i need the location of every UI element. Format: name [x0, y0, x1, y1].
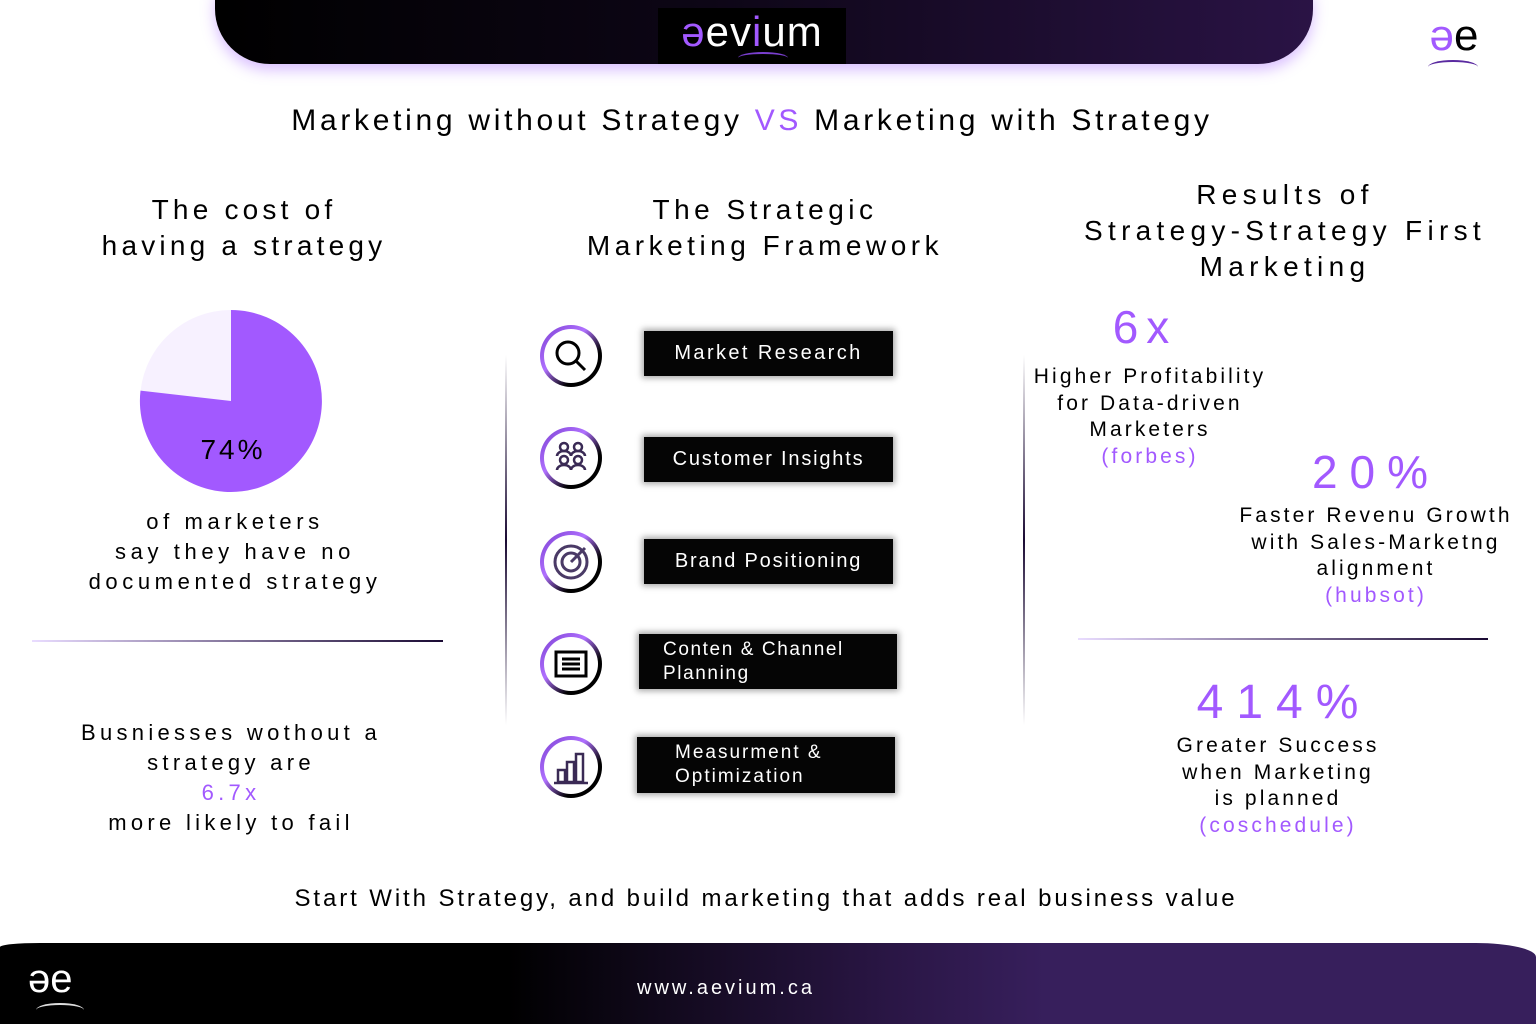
text: revenue [1239, 504, 1513, 606]
footer logo: əe [28, 957, 72, 1001]
heading: results: Strategy-Strategy First [1084, 215, 1486, 246]
text: profitability: Higher Profitability [1034, 365, 1266, 388]
panel: cost [32, 194, 443, 835]
header bar [215, 0, 1313, 64]
heading: results: Marketing [1200, 251, 1370, 282]
heading: framework: Marketing Framework [587, 230, 943, 261]
text: marketers: documented strategy [89, 569, 381, 594]
heading: results: Results of [1196, 179, 1374, 210]
step: brand positioning [644, 539, 893, 584]
heading: cost: The cost of [152, 194, 336, 225]
text: success: Greater Success [1177, 734, 1379, 757]
step: brand positioning: Brand Positioning [675, 550, 862, 572]
stat: 6x: 6x [1113, 301, 1177, 353]
text: profitability: for Data-driven [1057, 392, 1243, 414]
header logo [658, 8, 846, 64]
divider [32, 640, 443, 642]
icon: target [540, 531, 602, 593]
panel: framework [540, 194, 943, 799]
heading: cost: having a strategy [102, 230, 386, 261]
text: profitability: Marketers [1089, 418, 1211, 441]
pie chart 74% [140, 310, 322, 492]
text: revenue: (hubsot) [1325, 584, 1427, 606]
text: profitability: (forbes) [1101, 444, 1199, 468]
heading: framework: The Strategic [652, 194, 878, 225]
text: success: when Marketing [1182, 760, 1374, 784]
heading: cost [102, 194, 386, 261]
text: revenue: alignment [1317, 557, 1435, 580]
text: success: is planned [1215, 787, 1341, 810]
text: fail [81, 720, 381, 835]
stat: 414%: 414% [1197, 676, 1371, 729]
step: content planning: Planning [663, 662, 750, 684]
text: fail: Busniesses wothout a [81, 720, 381, 745]
text: success [1177, 734, 1379, 836]
panel: results [1034, 179, 1513, 836]
text: success: (coschedule) [1199, 814, 1357, 836]
footer logo [28, 957, 84, 1010]
footer [0, 943, 1536, 1024]
icon: people [540, 427, 602, 489]
step: measurement [637, 737, 895, 793]
step: measurement: Optimization [675, 766, 805, 787]
icon: bar chart [540, 736, 602, 798]
step: customer insights: Customer Insights [673, 448, 864, 470]
step: customer insights [644, 437, 893, 482]
text: marketers: of marketers [146, 509, 324, 534]
heading: framework [587, 194, 943, 261]
step: market research [644, 331, 893, 376]
step: market research: Market Research [674, 342, 863, 364]
text: fail: strategy are [147, 750, 315, 775]
heading: results [1084, 179, 1486, 282]
tagline: Start With Strategy, and build marketing that adds real business value [295, 885, 1237, 912]
header logo: əevium [681, 8, 823, 55]
divider [1078, 638, 1488, 640]
text: profitability [1034, 365, 1266, 468]
text: revenue: Faster Revenu Growth [1239, 504, 1513, 527]
text: fail: 6.7x [202, 780, 260, 805]
text: marketers [89, 509, 381, 594]
stat: 20%: 20% [1312, 446, 1440, 498]
step: content planning: Conten & Channel [663, 638, 844, 660]
step: measurement: Measurment & [675, 742, 823, 763]
step: content planning [639, 634, 897, 689]
icon: search [540, 325, 602, 387]
footer url: www.aevium.ca [637, 977, 815, 999]
pie label: 74% [200, 434, 266, 465]
text: fail: more likely to fail [108, 810, 354, 835]
title: Marketing without Strategy VS Marketing with Strategy [291, 104, 1213, 137]
corner logo: əe [1430, 11, 1478, 60]
text: revenue: with Sales-Marketng [1251, 530, 1501, 554]
text: marketers: say they have no [115, 539, 355, 564]
icon: document [540, 633, 602, 695]
vertical lines [505, 355, 507, 725]
